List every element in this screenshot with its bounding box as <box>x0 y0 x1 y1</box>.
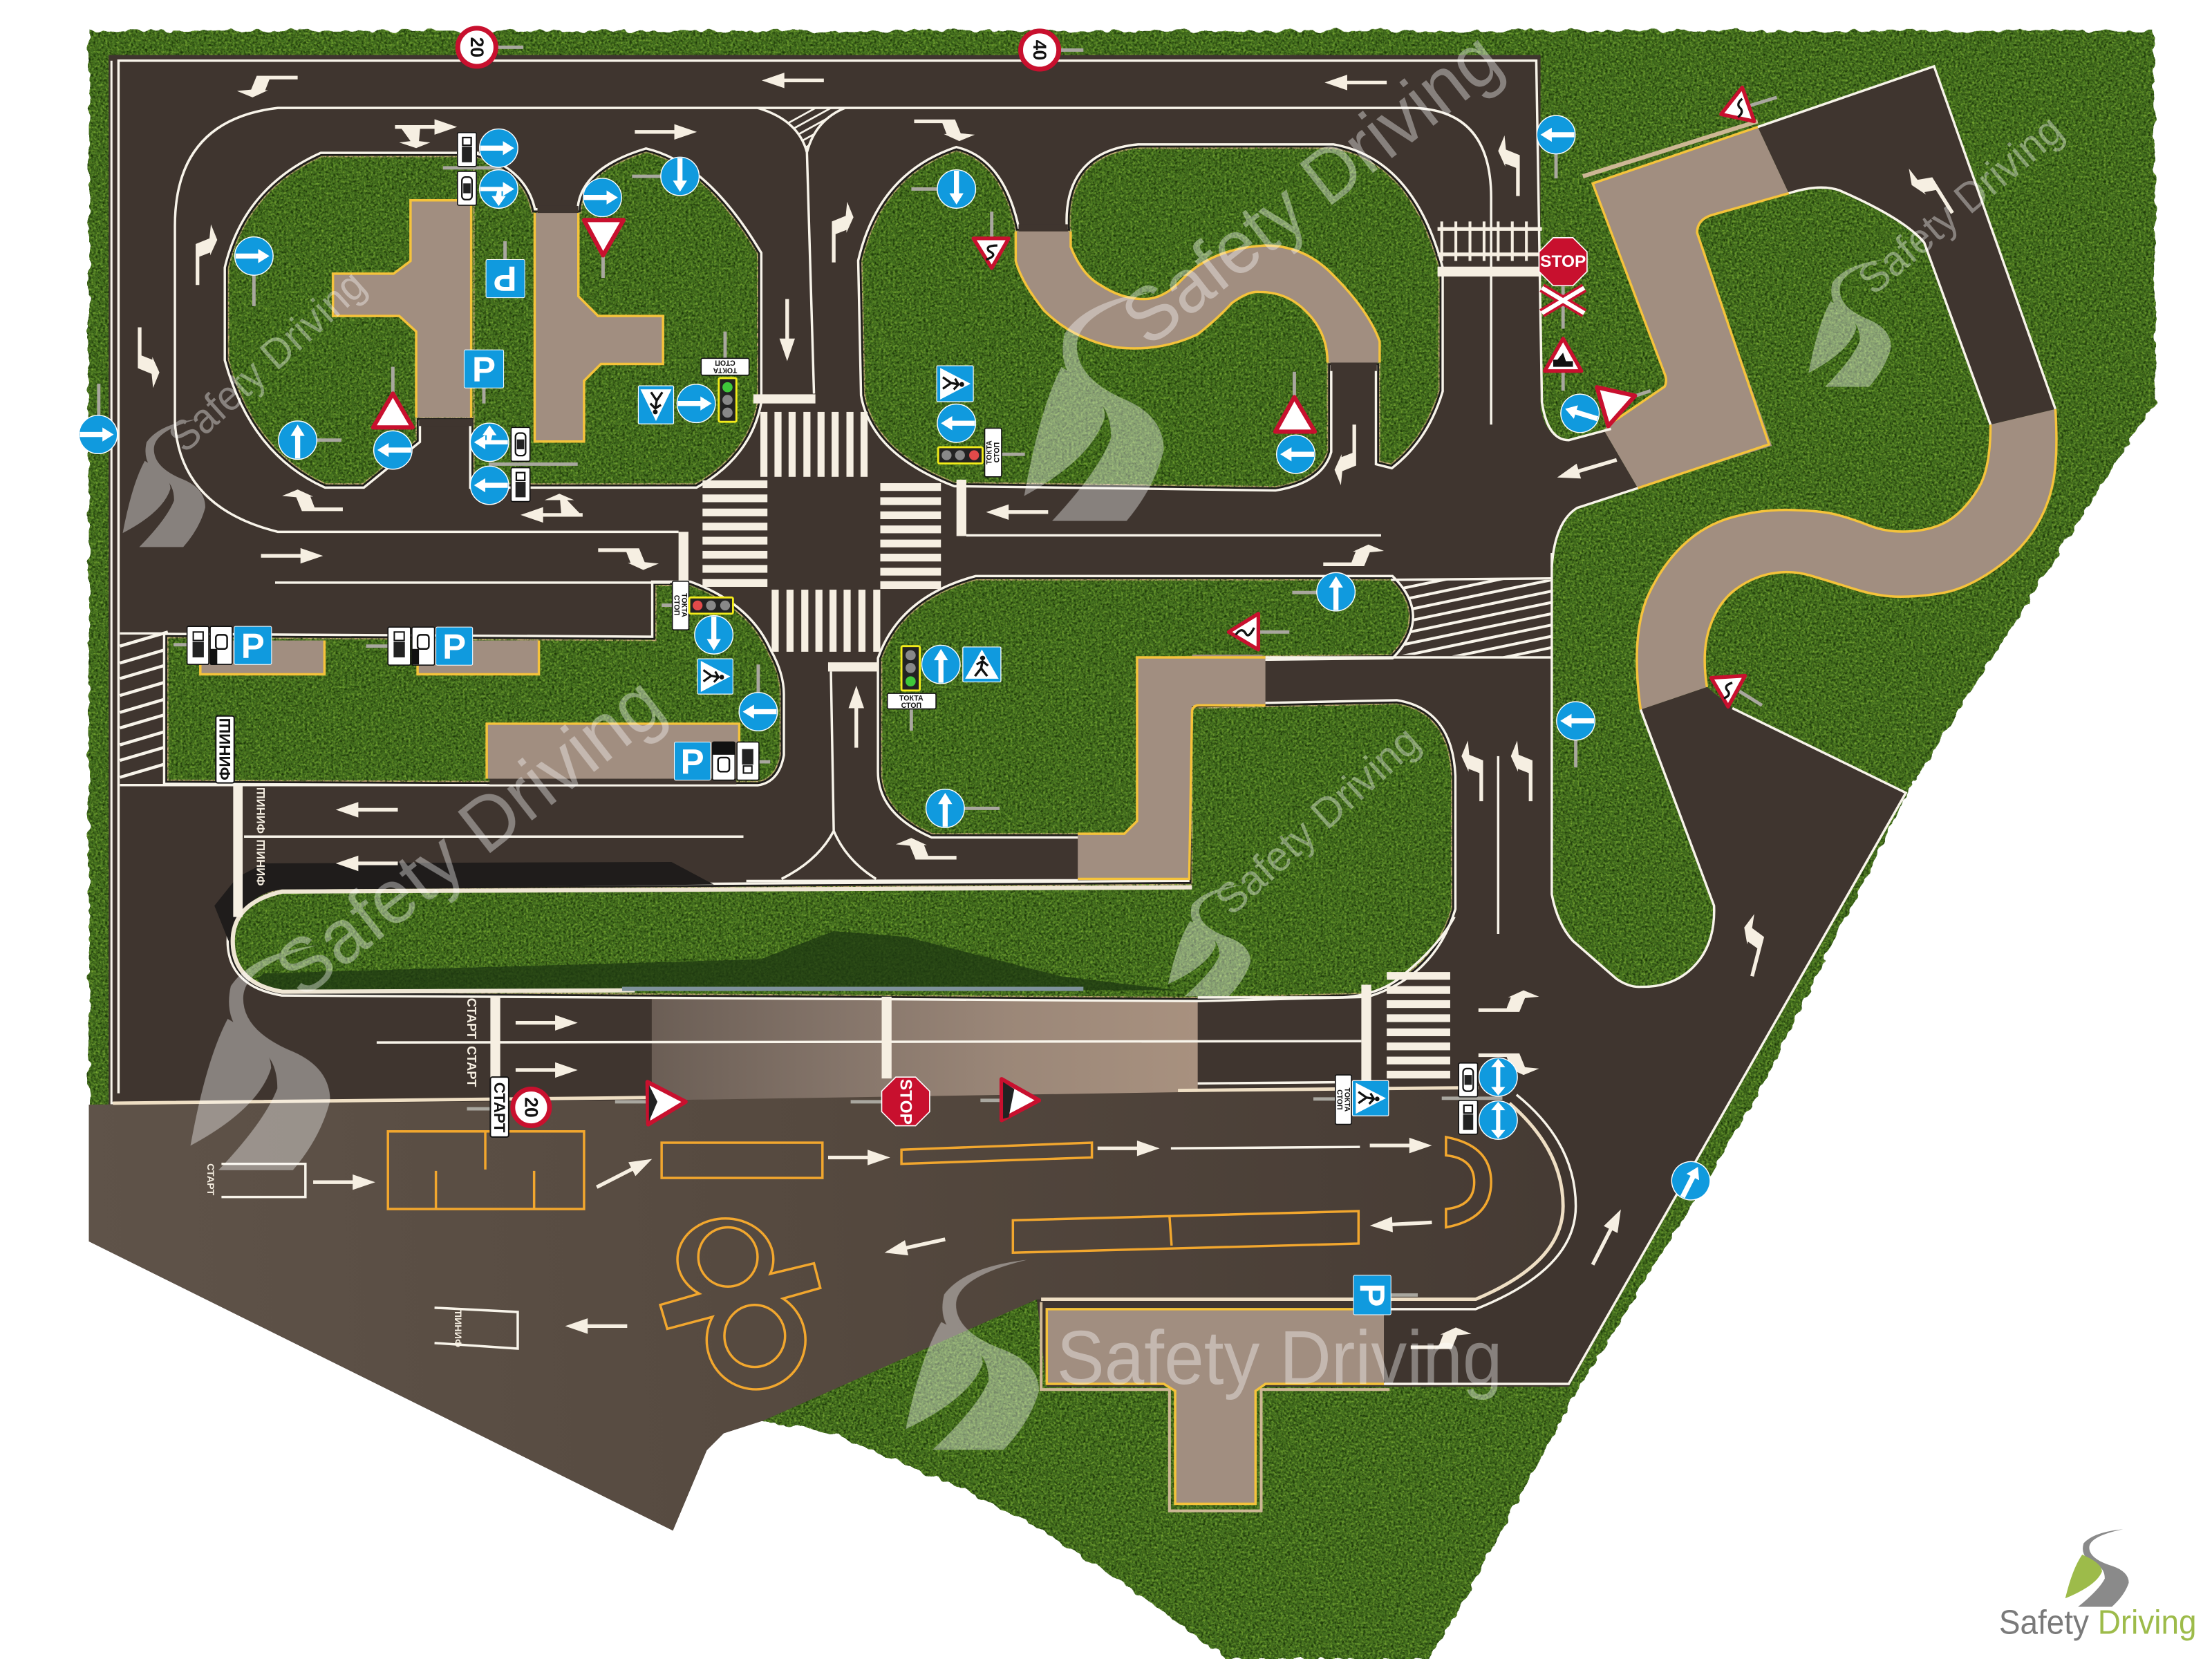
plate: stop line vertical: ТОКТА <box>986 440 994 465</box>
sign: speed limit 20 top: 20 <box>467 37 487 57</box>
sign: lane left on lobe <box>1557 702 1595 767</box>
sign: lane left centre <box>937 404 975 442</box>
sign: stop: STOP <box>1540 252 1586 271</box>
plate: stop line inverted: ТОКТА <box>713 366 737 375</box>
sign: lane up-right on outer edge <box>1665 1155 1716 1206</box>
curved U frame <box>1446 1137 1491 1228</box>
turn lane arrows <box>138 76 1954 1349</box>
signs: lane pair top with truck and car plates <box>443 129 518 208</box>
sign: parking rotated: P <box>1353 1283 1392 1306</box>
long parking strip <box>1013 1211 1358 1253</box>
sign: stop rotated <box>851 1077 930 1126</box>
parking sign group 3: P <box>681 742 704 782</box>
stop lines <box>233 267 1539 1089</box>
finish lane labels: ФИНИШ <box>254 839 268 886</box>
lot curb <box>113 1087 1563 1300</box>
sign: parking rotated <box>1353 1275 1418 1315</box>
tan cross road 2 <box>534 213 663 442</box>
hatch: left of parking island <box>120 632 168 777</box>
figure eight <box>660 1219 821 1389</box>
finish label: ФИНИШ <box>453 1308 464 1347</box>
sign: lane right <box>583 178 621 216</box>
watermarks <box>123 15 2072 1450</box>
crosswalk lower right <box>1387 972 1450 1078</box>
plate and pedestrian sign lower: ТОКТА <box>1343 1087 1351 1112</box>
watermark text 2: Safety Driving <box>1106 15 1517 362</box>
tan parking pockets <box>200 641 739 779</box>
road shadow above median <box>214 862 714 941</box>
asphalt: upper right section <box>1758 66 2055 424</box>
watermark text 3: Safety Driving <box>1849 106 2072 303</box>
narrow slalom strip <box>901 1143 1092 1164</box>
plate: stop line vertical: СТОП <box>993 442 1002 462</box>
plate: stop line left junction <box>662 581 689 630</box>
sign: parking inverted: P <box>494 259 517 299</box>
sign: lane left lower junction <box>739 664 778 731</box>
plate: start <box>467 1077 509 1137</box>
plate: stop line left junction: СТОП <box>673 595 681 615</box>
plate: stop line left junction: ТОКТА <box>680 593 688 617</box>
island shadow on median <box>259 931 1178 991</box>
tan Z road lower island <box>1078 657 1266 879</box>
traffic light left junction <box>689 597 733 614</box>
start lane labels: СТАРТ <box>465 1046 479 1087</box>
crosswalk top <box>760 412 868 477</box>
sign: pedestrian inverted <box>638 386 673 424</box>
start lane labels: СТАРТ <box>465 998 479 1040</box>
sign: lane up island D <box>1292 572 1355 611</box>
logo wordmark: Safety Driving <box>1999 1604 2197 1641</box>
watermark text 4: Safety Driving <box>260 659 679 1013</box>
sign: lane left centre right <box>1277 435 1315 474</box>
sign: stop rotated: STOP <box>897 1079 915 1125</box>
traffic light green <box>719 378 736 422</box>
sign: lane down <box>632 157 699 196</box>
sign: speed limit 40 top <box>1021 31 1083 69</box>
road gaps through curbs <box>419 206 1377 839</box>
signs: double lane pair lower <box>1442 1058 1517 1139</box>
sign: yield down <box>584 220 624 278</box>
start label: СТАРТ <box>205 1163 216 1195</box>
crosswalk right <box>880 483 941 589</box>
start lane labels <box>465 998 479 1087</box>
tan T road bottom <box>1041 1302 1389 1511</box>
sign: lane down centre island <box>911 170 975 208</box>
traffic light red <box>938 447 982 463</box>
tan serpentine road right <box>1637 409 2056 710</box>
watermark text 5: Safety Driving <box>1206 717 1428 924</box>
watermark logo 3 <box>1808 260 1891 387</box>
island curbs <box>168 148 1452 997</box>
watermark logo 6 <box>906 1259 1039 1450</box>
logo road mark <box>2078 1529 2129 1606</box>
sign: winding road island D <box>1229 614 1289 650</box>
tan cross road 1 <box>333 200 471 418</box>
watermark logo 5 <box>1168 885 1250 996</box>
sign: parking: P <box>472 350 496 389</box>
sign: lane down left junction <box>695 616 733 654</box>
sign: lane right at light <box>677 384 715 422</box>
sign: stop <box>1539 238 1587 285</box>
sign: lane left by top corner <box>1537 115 1575 178</box>
sign: speed limit 40 top: 40 <box>1029 40 1050 60</box>
crosswalk bottom <box>771 590 880 652</box>
sign: winding road top right <box>1721 88 1777 122</box>
sign: winding road triangle <box>973 212 1009 268</box>
sign: pedestrian left junction <box>697 659 733 694</box>
grass islands <box>168 148 1452 997</box>
sign: railway cross <box>1542 286 1584 329</box>
logo green wedge <box>2065 1555 2102 1598</box>
sign: lane up at light <box>921 645 960 684</box>
median curb <box>233 888 1192 992</box>
plate: stop line inverted <box>701 332 749 375</box>
parking sign group 3 <box>675 742 770 782</box>
sign: winding road lower right <box>1712 676 1762 706</box>
watermark text 6: Safety Driving <box>1057 1315 1502 1400</box>
sign: train warning <box>1545 339 1582 391</box>
plate: stop line vertical <box>984 428 1025 477</box>
plate: start: СТАРТ <box>491 1082 508 1133</box>
sign: yield sideways west <box>615 1082 686 1125</box>
sign: warning triangle <box>373 367 413 427</box>
sign: pedestrian <box>937 366 973 402</box>
watermark text 1: Safety Driving <box>160 261 374 461</box>
sign: lane right on left island <box>235 237 273 306</box>
parking test frame <box>388 1132 584 1209</box>
sign: pedestrian crossing island D <box>963 647 1001 682</box>
brand logo <box>1999 1529 2197 1641</box>
sign: lane up lower island D <box>926 789 1000 827</box>
finish lane labels <box>254 787 268 886</box>
main asphalt <box>89 55 1906 1530</box>
finish lane labels: ФИНИШ <box>254 787 268 834</box>
watermark logo 1 <box>123 419 205 547</box>
parking sign group 2 <box>366 627 473 666</box>
railway crossing <box>1438 221 1542 261</box>
practice lot surface <box>89 1087 1563 1530</box>
sign: lane up <box>279 421 341 459</box>
plate and pedestrian sign lower <box>1313 1075 1389 1125</box>
watermark logo 2 <box>1024 292 1164 521</box>
plate: stop line inverted: СТОП <box>715 359 735 367</box>
finish box <box>435 1308 518 1349</box>
parking sign group 2: P <box>442 627 466 666</box>
test box <box>662 1143 823 1178</box>
start box <box>221 1164 306 1197</box>
plate and pedestrian sign lower: СТОП <box>1335 1089 1343 1110</box>
parking sign group 1: P <box>241 626 265 666</box>
parking sign group 1 <box>174 626 272 666</box>
hatch: right lane gore <box>1401 579 1551 657</box>
tan test strip on main road <box>652 996 1198 1100</box>
sign: yield tilted <box>1597 387 1651 426</box>
plate: stop line horizontal <box>888 693 936 731</box>
traffic light island D <box>901 646 920 691</box>
sign: speed limit 20 top <box>458 28 523 66</box>
plate: stop line horizontal: ТОКТА <box>899 694 924 702</box>
sign: speed limit 20 bottom <box>513 1089 550 1126</box>
tan zig-zag road upper right <box>1583 122 1789 488</box>
sign: warning triangle centre <box>1275 372 1315 431</box>
sign: parking <box>464 350 504 404</box>
sign: parking inverted <box>486 241 525 299</box>
signs: lane pair lower with plates <box>470 423 578 505</box>
tan S road in centre island <box>1015 232 1380 362</box>
sign: speed limit 20 bottom: 20 <box>521 1097 541 1118</box>
plate: finish: ФИНИШ <box>216 718 234 780</box>
road lines <box>111 61 2055 1384</box>
sign: lane left tilted <box>1556 389 1604 438</box>
sign: lane right far left <box>79 384 118 453</box>
sign: yield sideways east <box>980 1079 1039 1120</box>
straight lane arrows <box>261 73 1628 1334</box>
watermark logo 4 <box>191 945 330 1170</box>
sign: lane left <box>374 431 412 469</box>
plate: stop line horizontal: СТОП <box>901 702 921 710</box>
crosswalk left <box>702 480 767 587</box>
